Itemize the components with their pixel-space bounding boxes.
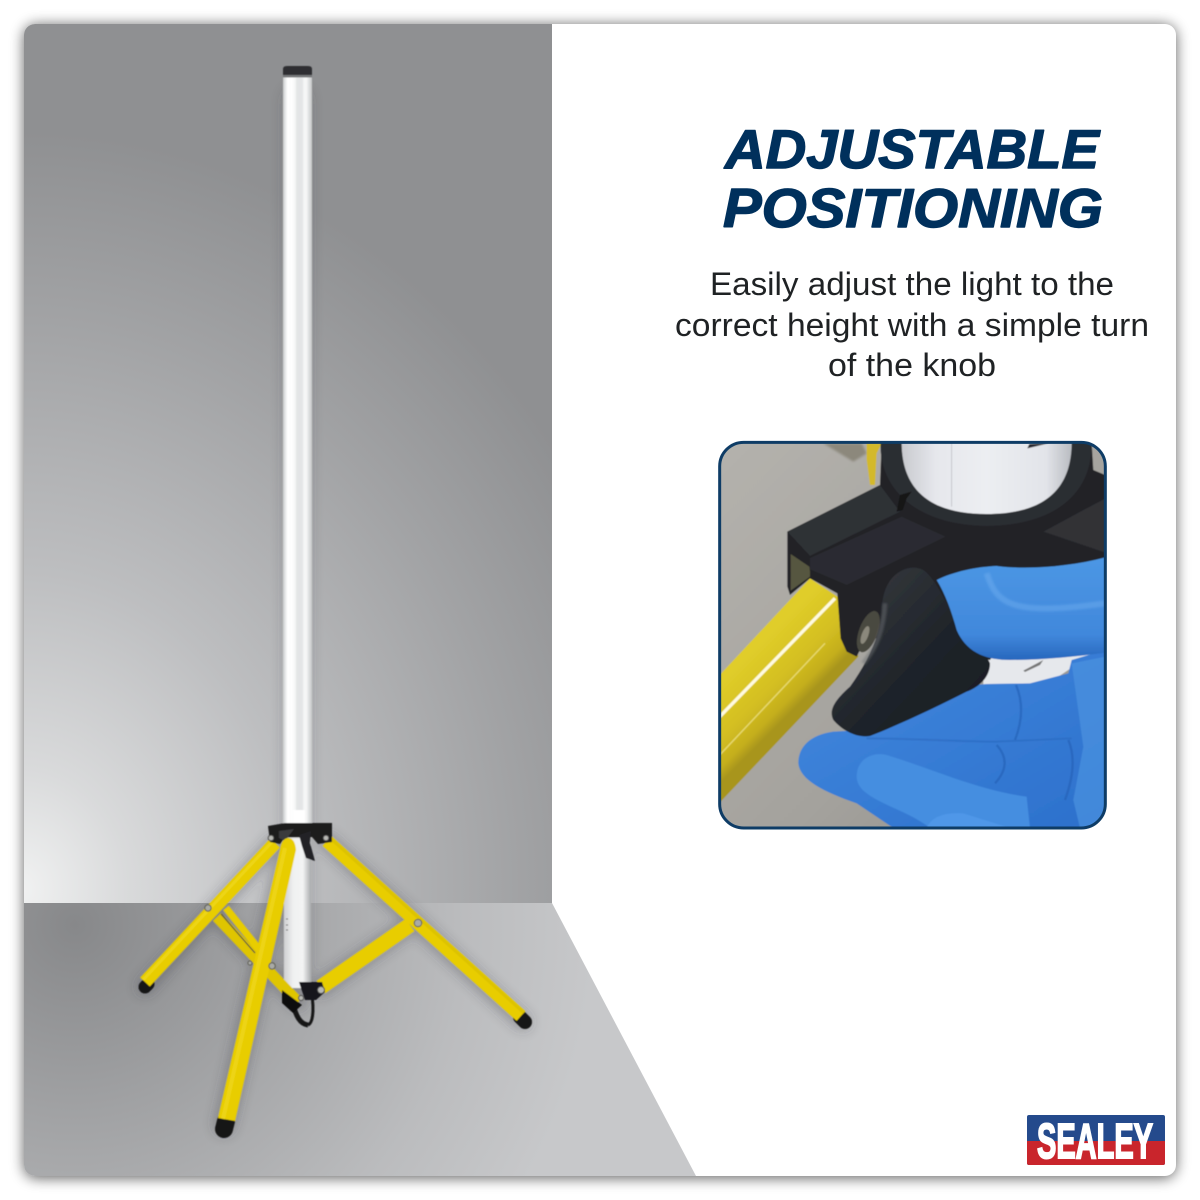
upper finger of glove (937, 557, 1105, 660)
blurred background (823, 443, 867, 462)
body text: Easily adjust the light to the (710, 266, 1114, 302)
illustration: tripod work light (143, 66, 525, 1129)
right leg (327, 838, 525, 1022)
adjustment knob (299, 831, 315, 861)
white light cylinder (902, 442, 1072, 514)
body text (675, 266, 1149, 383)
leg shadows (145, 100, 523, 1125)
panel: studio backdrop (24, 24, 696, 1176)
power cable (293, 996, 313, 1025)
right folding brace (321, 925, 410, 987)
photo: hand turning the height adjustment knob (720, 442, 1105, 828)
heading (723, 118, 1103, 239)
bolt (856, 610, 880, 653)
top bracket (268, 823, 332, 844)
lower cylinder (982, 654, 1090, 685)
yellow tube (720, 578, 858, 803)
front leg (218, 838, 296, 1129)
photo border (720, 442, 1105, 828)
left leg (143, 841, 275, 987)
body text: of the knob (828, 347, 996, 383)
bottom bracket (298, 982, 325, 1000)
heading: ADJUSTABLE (723, 118, 1101, 180)
body text: correct height with a simple turn (675, 307, 1149, 343)
rubber knob (832, 568, 990, 736)
pivot bolts (205, 905, 422, 969)
black clamp ring (787, 442, 1105, 660)
left folding brace (217, 908, 302, 1013)
light tube (283, 66, 312, 827)
heading: POSITIONING (723, 177, 1103, 239)
lower glove (798, 650, 1105, 828)
lower pole (284, 838, 311, 988)
